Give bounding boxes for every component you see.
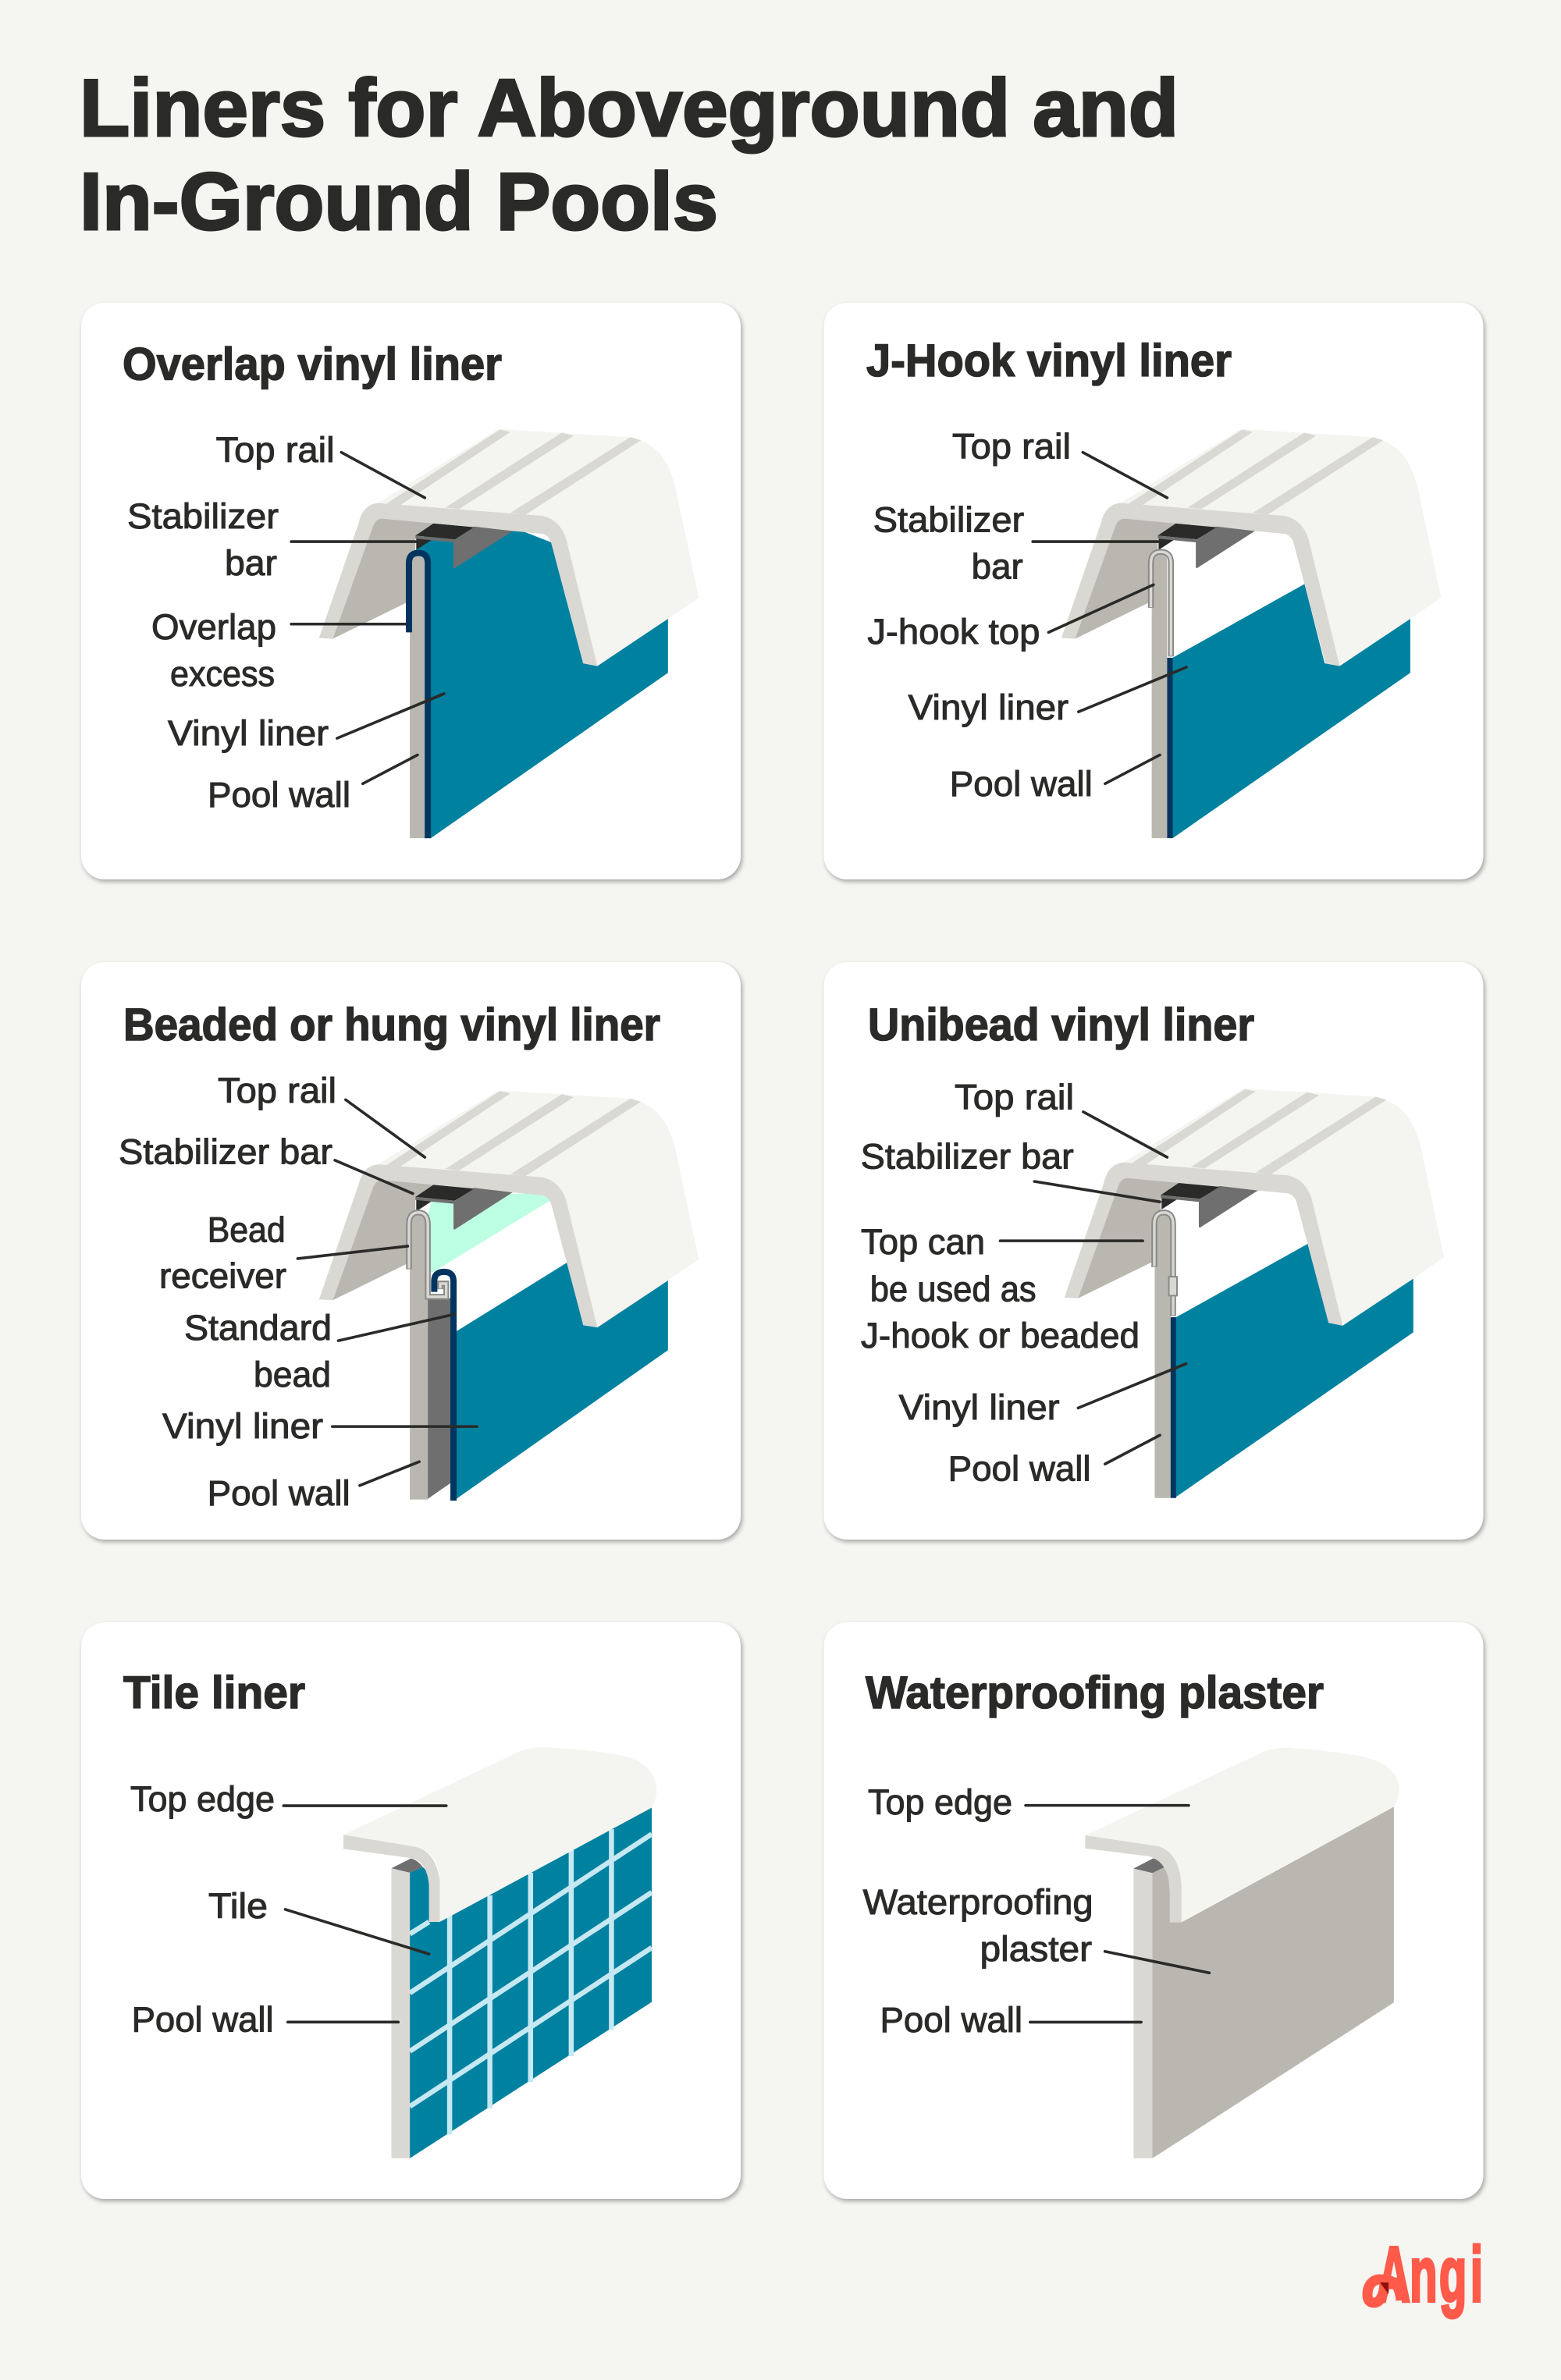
labels: Stabilizer xyxy=(127,496,279,536)
labels: Vinyl liner xyxy=(162,1406,323,1446)
labels: Top can xyxy=(861,1222,985,1262)
navy liner edge xyxy=(1171,1317,1176,1498)
top edge xyxy=(1085,1748,1399,1922)
labels: bar xyxy=(225,543,277,583)
heading: unibead vinyl liner: Unibead vinyl liner xyxy=(868,1000,1254,1050)
leader lines xyxy=(291,453,444,783)
labels: Vinyl liner xyxy=(168,713,329,753)
leader lines xyxy=(1026,1806,1209,2022)
labels: J-hook top xyxy=(867,612,1040,652)
labels: receiver xyxy=(159,1256,286,1296)
vinyl liner surface xyxy=(416,524,668,838)
labels xyxy=(863,1782,1093,2040)
labels: excess xyxy=(170,654,275,694)
tile surface xyxy=(410,1808,652,2158)
labels: Top edge xyxy=(130,1779,275,1819)
labels: plaster xyxy=(980,1929,1092,1969)
labels: Vinyl liner xyxy=(899,1387,1060,1427)
panel: overlap vinyl liner xyxy=(81,303,741,879)
dark spacer xyxy=(428,1298,451,1499)
labels xyxy=(867,426,1093,804)
labels: Standard xyxy=(184,1308,332,1348)
title: In-Ground Pools xyxy=(80,157,718,247)
pool wall xyxy=(410,1214,428,1500)
labels: Pool wall xyxy=(208,1473,350,1513)
leader lines xyxy=(1033,453,1186,783)
labels: Top rail xyxy=(216,430,335,470)
top rail xyxy=(319,1090,699,1327)
panel: unibead vinyl liner xyxy=(824,962,1483,1540)
labels: Top rail xyxy=(952,426,1071,467)
leader lines xyxy=(283,1806,446,2022)
bead receiver xyxy=(409,1213,446,1297)
heading: waterproofing plaster: Waterproofing plaster xyxy=(866,1668,1324,1718)
top hook usable as j-hook or bead xyxy=(1154,1213,1177,1316)
vinyl liner surface xyxy=(1173,584,1410,838)
labels: Overlap xyxy=(151,607,276,647)
panel: beaded or hung vinyl liner xyxy=(81,962,741,1540)
pool wall xyxy=(1133,1869,1152,2158)
plaster surface xyxy=(1152,1806,1394,2158)
labels xyxy=(119,1071,350,1513)
heading: beaded or hung vinyl liner: Beaded or hung vinyl liner xyxy=(123,1000,660,1050)
panel: j-hook vinyl liner xyxy=(824,303,1483,879)
labels: bar xyxy=(972,547,1023,587)
diagram: unibead vinyl liner xyxy=(1000,1089,1444,1498)
pool wall xyxy=(392,1868,410,2158)
pool wall xyxy=(1154,1213,1171,1498)
top edge xyxy=(343,1747,656,1922)
tile grout lines xyxy=(410,1829,652,2134)
heading: tile liner: Tile liner xyxy=(123,1668,305,1718)
heading: j-hook vinyl liner: J-Hook vinyl liner xyxy=(866,336,1232,386)
logo: Angi: Angi xyxy=(1378,2232,1483,2318)
diagram: tile liner xyxy=(283,1747,656,2158)
labels: be used as xyxy=(870,1270,1037,1309)
labels: Stabilizer xyxy=(873,499,1024,540)
panel: waterproofing plaster xyxy=(824,1622,1483,2199)
labels: Stabilizer bar xyxy=(861,1137,1074,1177)
labels: Top rail xyxy=(218,1071,336,1110)
labels: Pool wall xyxy=(132,1999,274,2040)
pool wall top xyxy=(1133,1858,1165,1873)
diagram: waterproofing plaster xyxy=(1026,1748,1399,2158)
labels: Pool wall xyxy=(948,1448,1091,1489)
leader lines xyxy=(297,1099,477,1486)
title xyxy=(80,63,1179,247)
labels xyxy=(130,1779,275,2040)
overlap excess of liner xyxy=(409,553,428,838)
diagram: beaded or hung vinyl liner xyxy=(297,1090,699,1501)
diagram: j-hook vinyl liner xyxy=(1033,429,1441,838)
labels: Stabilizer bar xyxy=(119,1132,332,1172)
labels: Top edge xyxy=(868,1782,1012,1822)
standard bead of liner xyxy=(434,1272,453,1501)
title: Liners for Aboveground and xyxy=(80,63,1179,154)
labels: Pool wall xyxy=(880,2000,1022,2040)
labels xyxy=(861,1077,1140,1489)
pool wall xyxy=(1152,554,1167,838)
leader lines xyxy=(1000,1112,1186,1464)
labels: bead xyxy=(254,1355,331,1394)
top rail xyxy=(1061,429,1441,666)
labels: Bead xyxy=(208,1210,286,1250)
top rail xyxy=(319,429,699,666)
labels: Waterproofing xyxy=(863,1882,1093,1922)
navy liner edge xyxy=(1167,658,1173,838)
labels: J-hook or beaded xyxy=(861,1316,1140,1355)
labels: Pool wall xyxy=(208,775,350,815)
labels: Pool wall xyxy=(950,764,1093,804)
labels: Vinyl liner xyxy=(909,687,1069,727)
labels: Top rail xyxy=(955,1077,1074,1117)
j-hook top xyxy=(1151,552,1171,656)
diagram: overlap vinyl liner xyxy=(291,429,699,838)
top rail xyxy=(1065,1089,1444,1326)
vinyl liner surface xyxy=(457,1263,668,1499)
mint water line area xyxy=(427,1192,551,1272)
pool wall top xyxy=(392,1858,423,1873)
pool wall xyxy=(410,554,425,838)
vinyl liner surface xyxy=(1176,1244,1413,1497)
heading: overlap vinyl liner: Overlap vinyl liner xyxy=(123,339,502,390)
labels xyxy=(127,430,350,815)
panel: tile liner xyxy=(81,1622,741,2199)
labels: Tile xyxy=(208,1886,268,1926)
